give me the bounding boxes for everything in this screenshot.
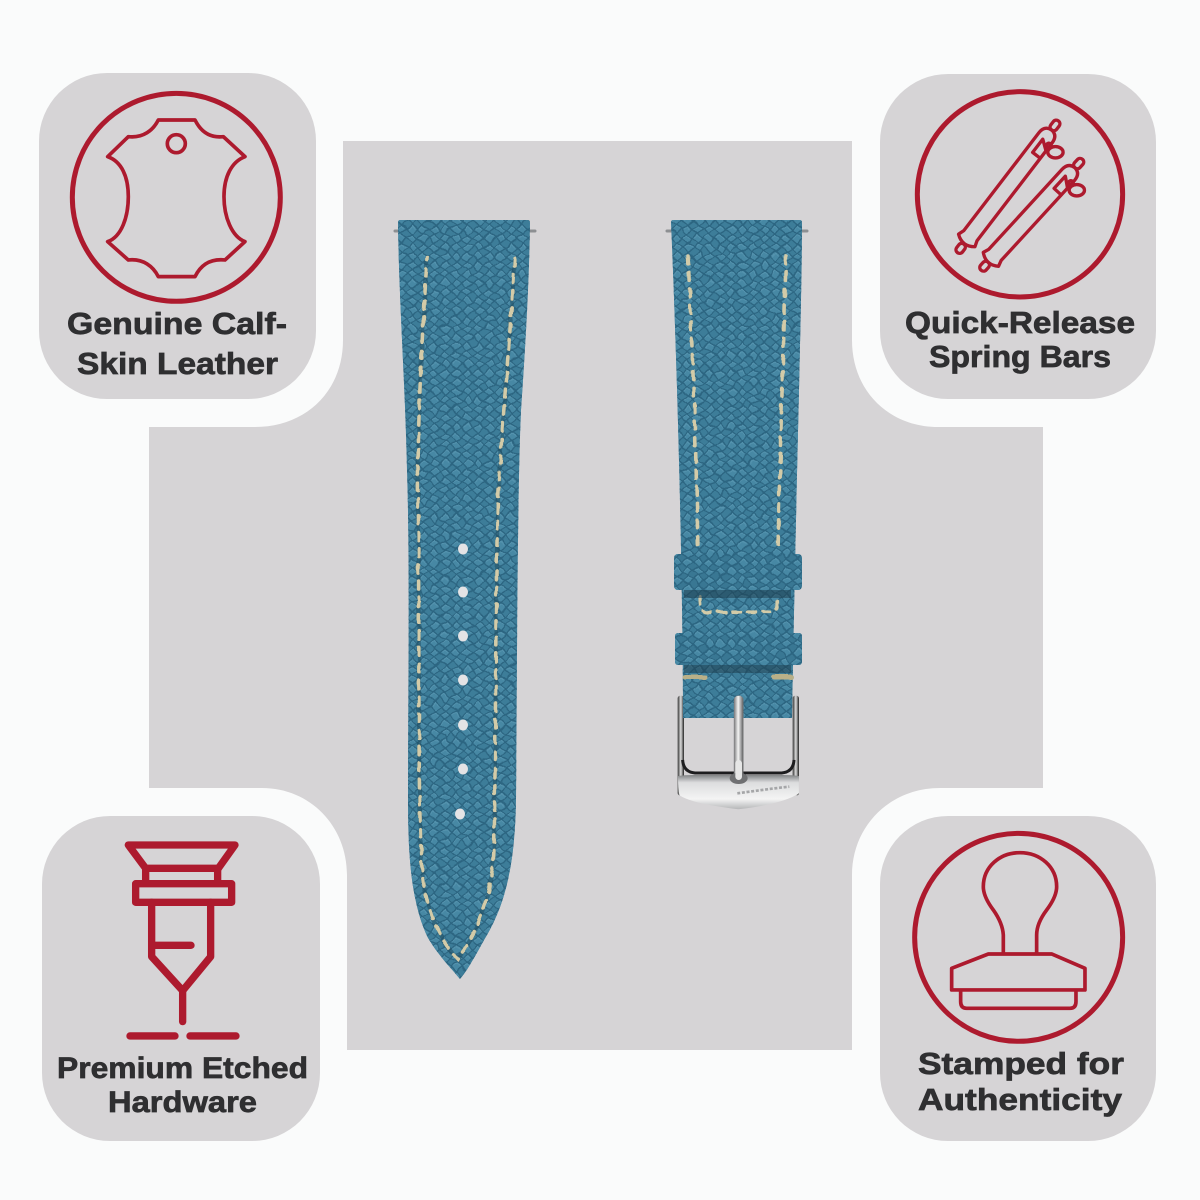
icon: spring bars (917, 92, 1123, 297)
stitching (418, 258, 515, 960)
panel: premium etched hardware: Hardware (108, 1086, 257, 1119)
label: Genuine Calf- (67, 306, 287, 341)
card background (880, 816, 1156, 1141)
icon: leather hide (72, 93, 280, 301)
card background (42, 816, 320, 1141)
label: Premium Etched (57, 1052, 308, 1085)
panel: genuine calf-skin leather: Skin Leather (77, 346, 278, 381)
panel: genuine calf-skin leather (39, 73, 316, 399)
watch strap: buckle piece (660, 210, 815, 809)
panel: stamped for authenticity (880, 816, 1156, 1141)
background panel: central grey shape (149, 141, 1043, 1050)
keeper loops (674, 554, 802, 590)
spring bar tips (395, 230, 535, 232)
panel: quick-release spring bars: Spring Bars (929, 339, 1111, 374)
strap leather (671, 220, 802, 718)
icon: stamp (915, 833, 1123, 1041)
label: Stamped for (918, 1046, 1124, 1081)
label: Quick-Release (905, 305, 1135, 340)
buckle frame bars (678, 696, 799, 796)
panel: quick-release spring bars (880, 74, 1156, 399)
panel: premium etched hardware (42, 816, 320, 1141)
spring bar tips (667, 230, 807, 232)
card background (39, 73, 316, 399)
panel: stamped for authenticity: Authenticity (918, 1082, 1123, 1117)
adjustment holes (455, 544, 468, 820)
buckle plate and pin (678, 696, 799, 809)
strap leather (398, 220, 530, 979)
icon: laser etcher (128, 845, 236, 1036)
stitching (685, 256, 791, 677)
card background (880, 74, 1156, 399)
watch strap: long piece (394, 220, 536, 979)
shadows under keepers (684, 590, 791, 673)
